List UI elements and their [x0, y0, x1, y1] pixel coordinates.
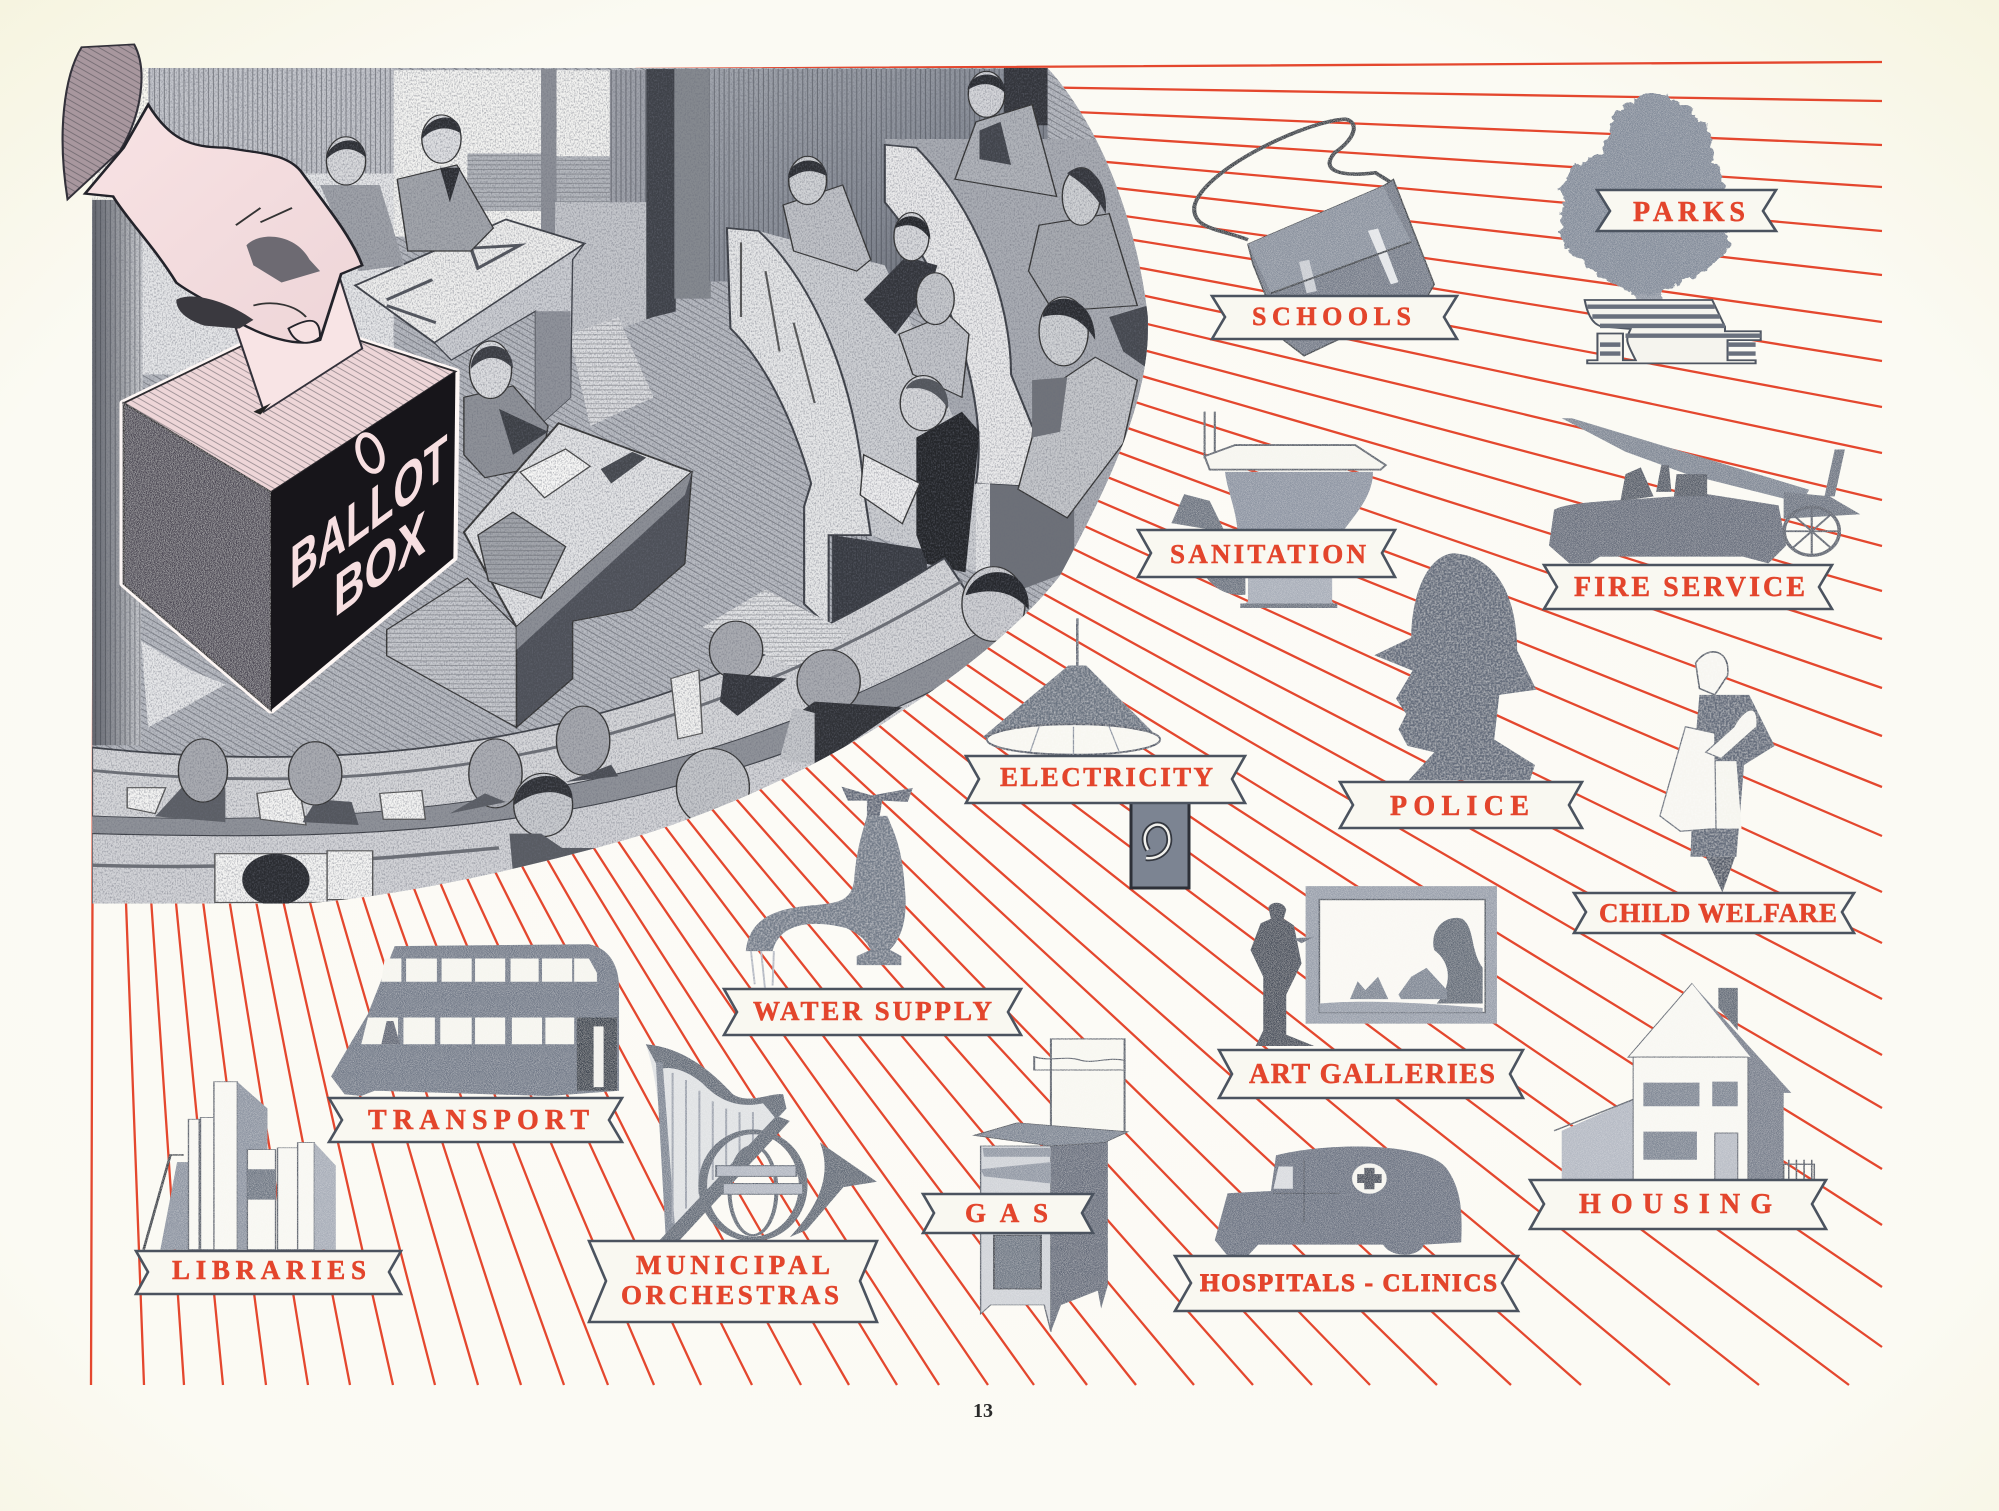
panel: water supply	[724, 787, 1021, 1035]
label: HOSPITALS - CLINICS	[1175, 1256, 1518, 1311]
label: LIBRARIES	[136, 1251, 401, 1294]
ballot box lettering	[290, 420, 447, 631]
icon: house	[1554, 983, 1814, 1180]
label: GAS	[923, 1194, 1093, 1233]
label: MUNICIPAL ORCHESTRAS	[589, 1241, 877, 1322]
clerks' desk	[355, 219, 585, 343]
label: ELECTRICITY	[966, 756, 1245, 803]
central desk and clerk	[387, 341, 692, 727]
bench one	[759, 231, 987, 575]
label: ART GALLERIES: ART GALLERIES	[1249, 1059, 1495, 1090]
panel: council chamber illustration	[63, 44, 1158, 908]
label: PARKS: PARKS	[1633, 197, 1745, 228]
label: HOUSING: HOUSING	[1579, 1189, 1772, 1220]
panel: child welfare	[1574, 652, 1854, 933]
label: FIRE SERVICE	[1544, 565, 1832, 609]
panel: transport	[329, 944, 622, 1142]
label: GAS: GAS	[965, 1198, 1048, 1228]
curved front rail	[92, 558, 1011, 908]
icon: park bench	[1585, 300, 1761, 363]
label: MUNICIPAL ORCHESTRAS: MUNICIPAL	[636, 1250, 830, 1280]
icon: gas cooker	[974, 1039, 1128, 1332]
icon: toilet	[1171, 412, 1386, 608]
label: ART GALLERIES	[1219, 1050, 1523, 1098]
label: PARKS	[1597, 190, 1776, 231]
label: WATER SUPPLY	[724, 989, 1021, 1035]
icon: nurse with child	[1660, 652, 1775, 892]
icon: harp and horn	[646, 1044, 877, 1241]
icon: books	[144, 1082, 336, 1250]
label: WATER SUPPLY: WATER SUPPLY	[753, 996, 992, 1026]
panel: police	[1340, 553, 1582, 828]
label: POLICE	[1340, 782, 1582, 828]
icon: police helmet silhouette	[1374, 553, 1536, 780]
label: SCHOOLS: SCHOOLS	[1252, 302, 1411, 331]
icon: hanging lamp	[983, 618, 1160, 755]
panel: sanitation	[1138, 412, 1395, 608]
bench two	[884, 144, 1032, 486]
panel: housing	[1530, 983, 1826, 1229]
label: ELECTRICITY: ELECTRICITY	[1000, 762, 1213, 792]
ballot box	[124, 271, 455, 710]
label: CHILD WELFARE: CHILD WELFARE	[1599, 898, 1837, 928]
icon: switch socket	[1131, 798, 1189, 888]
icon: statue and framed painting	[1251, 886, 1497, 1046]
label: MUNICIPAL ORCHESTRAS: ORCHESTRAS	[621, 1280, 839, 1310]
label: TRANSPORT: TRANSPORT	[368, 1105, 589, 1136]
front row figures	[155, 567, 1029, 905]
panel: art galleries	[1219, 886, 1523, 1098]
label: HOUSING	[1530, 1180, 1826, 1229]
panel: parks	[1560, 92, 1776, 363]
chamber scene	[92, 68, 1158, 908]
icon: tree	[1560, 92, 1730, 360]
label: POLICE: POLICE	[1390, 791, 1529, 822]
panel: schools	[1194, 119, 1457, 356]
floor	[141, 300, 850, 748]
label: FIRE SERVICE: FIRE SERVICE	[1574, 572, 1805, 603]
radiating red lines	[91, 62, 1882, 1385]
panel: gas	[923, 1039, 1128, 1332]
panel: electricity	[966, 618, 1245, 888]
panel: libraries	[136, 1082, 401, 1294]
label: SANITATION	[1138, 530, 1395, 577]
ballot box lettering: BALLOT	[290, 420, 447, 603]
panel: fire service	[1544, 418, 1860, 609]
icon: ambulance	[1215, 1147, 1462, 1256]
panel: hospitals and clinics	[1175, 1147, 1518, 1311]
icon: water tap	[746, 787, 913, 988]
panel: municipal orchestras	[589, 1044, 877, 1322]
label: TRANSPORT	[329, 1098, 622, 1142]
hand dropping ballot	[63, 44, 362, 343]
label: CHILD WELFARE	[1574, 893, 1854, 933]
back row figures	[320, 71, 1148, 572]
label: SCHOOLS	[1212, 296, 1457, 339]
icon: double-decker bus	[331, 944, 619, 1096]
ballot box lettering: BOX	[334, 496, 426, 631]
icon: satchel	[1194, 119, 1434, 356]
label: LIBRARIES: LIBRARIES	[172, 1255, 366, 1285]
pencil texture	[92, 68, 1151, 906]
label: HOSPITALS - CLINICS: HOSPITALS - CLINICS	[1200, 1270, 1497, 1297]
label: SANITATION: SANITATION	[1170, 539, 1366, 569]
icon: fire engine	[1549, 418, 1860, 563]
page number: 13	[973, 1400, 993, 1422]
